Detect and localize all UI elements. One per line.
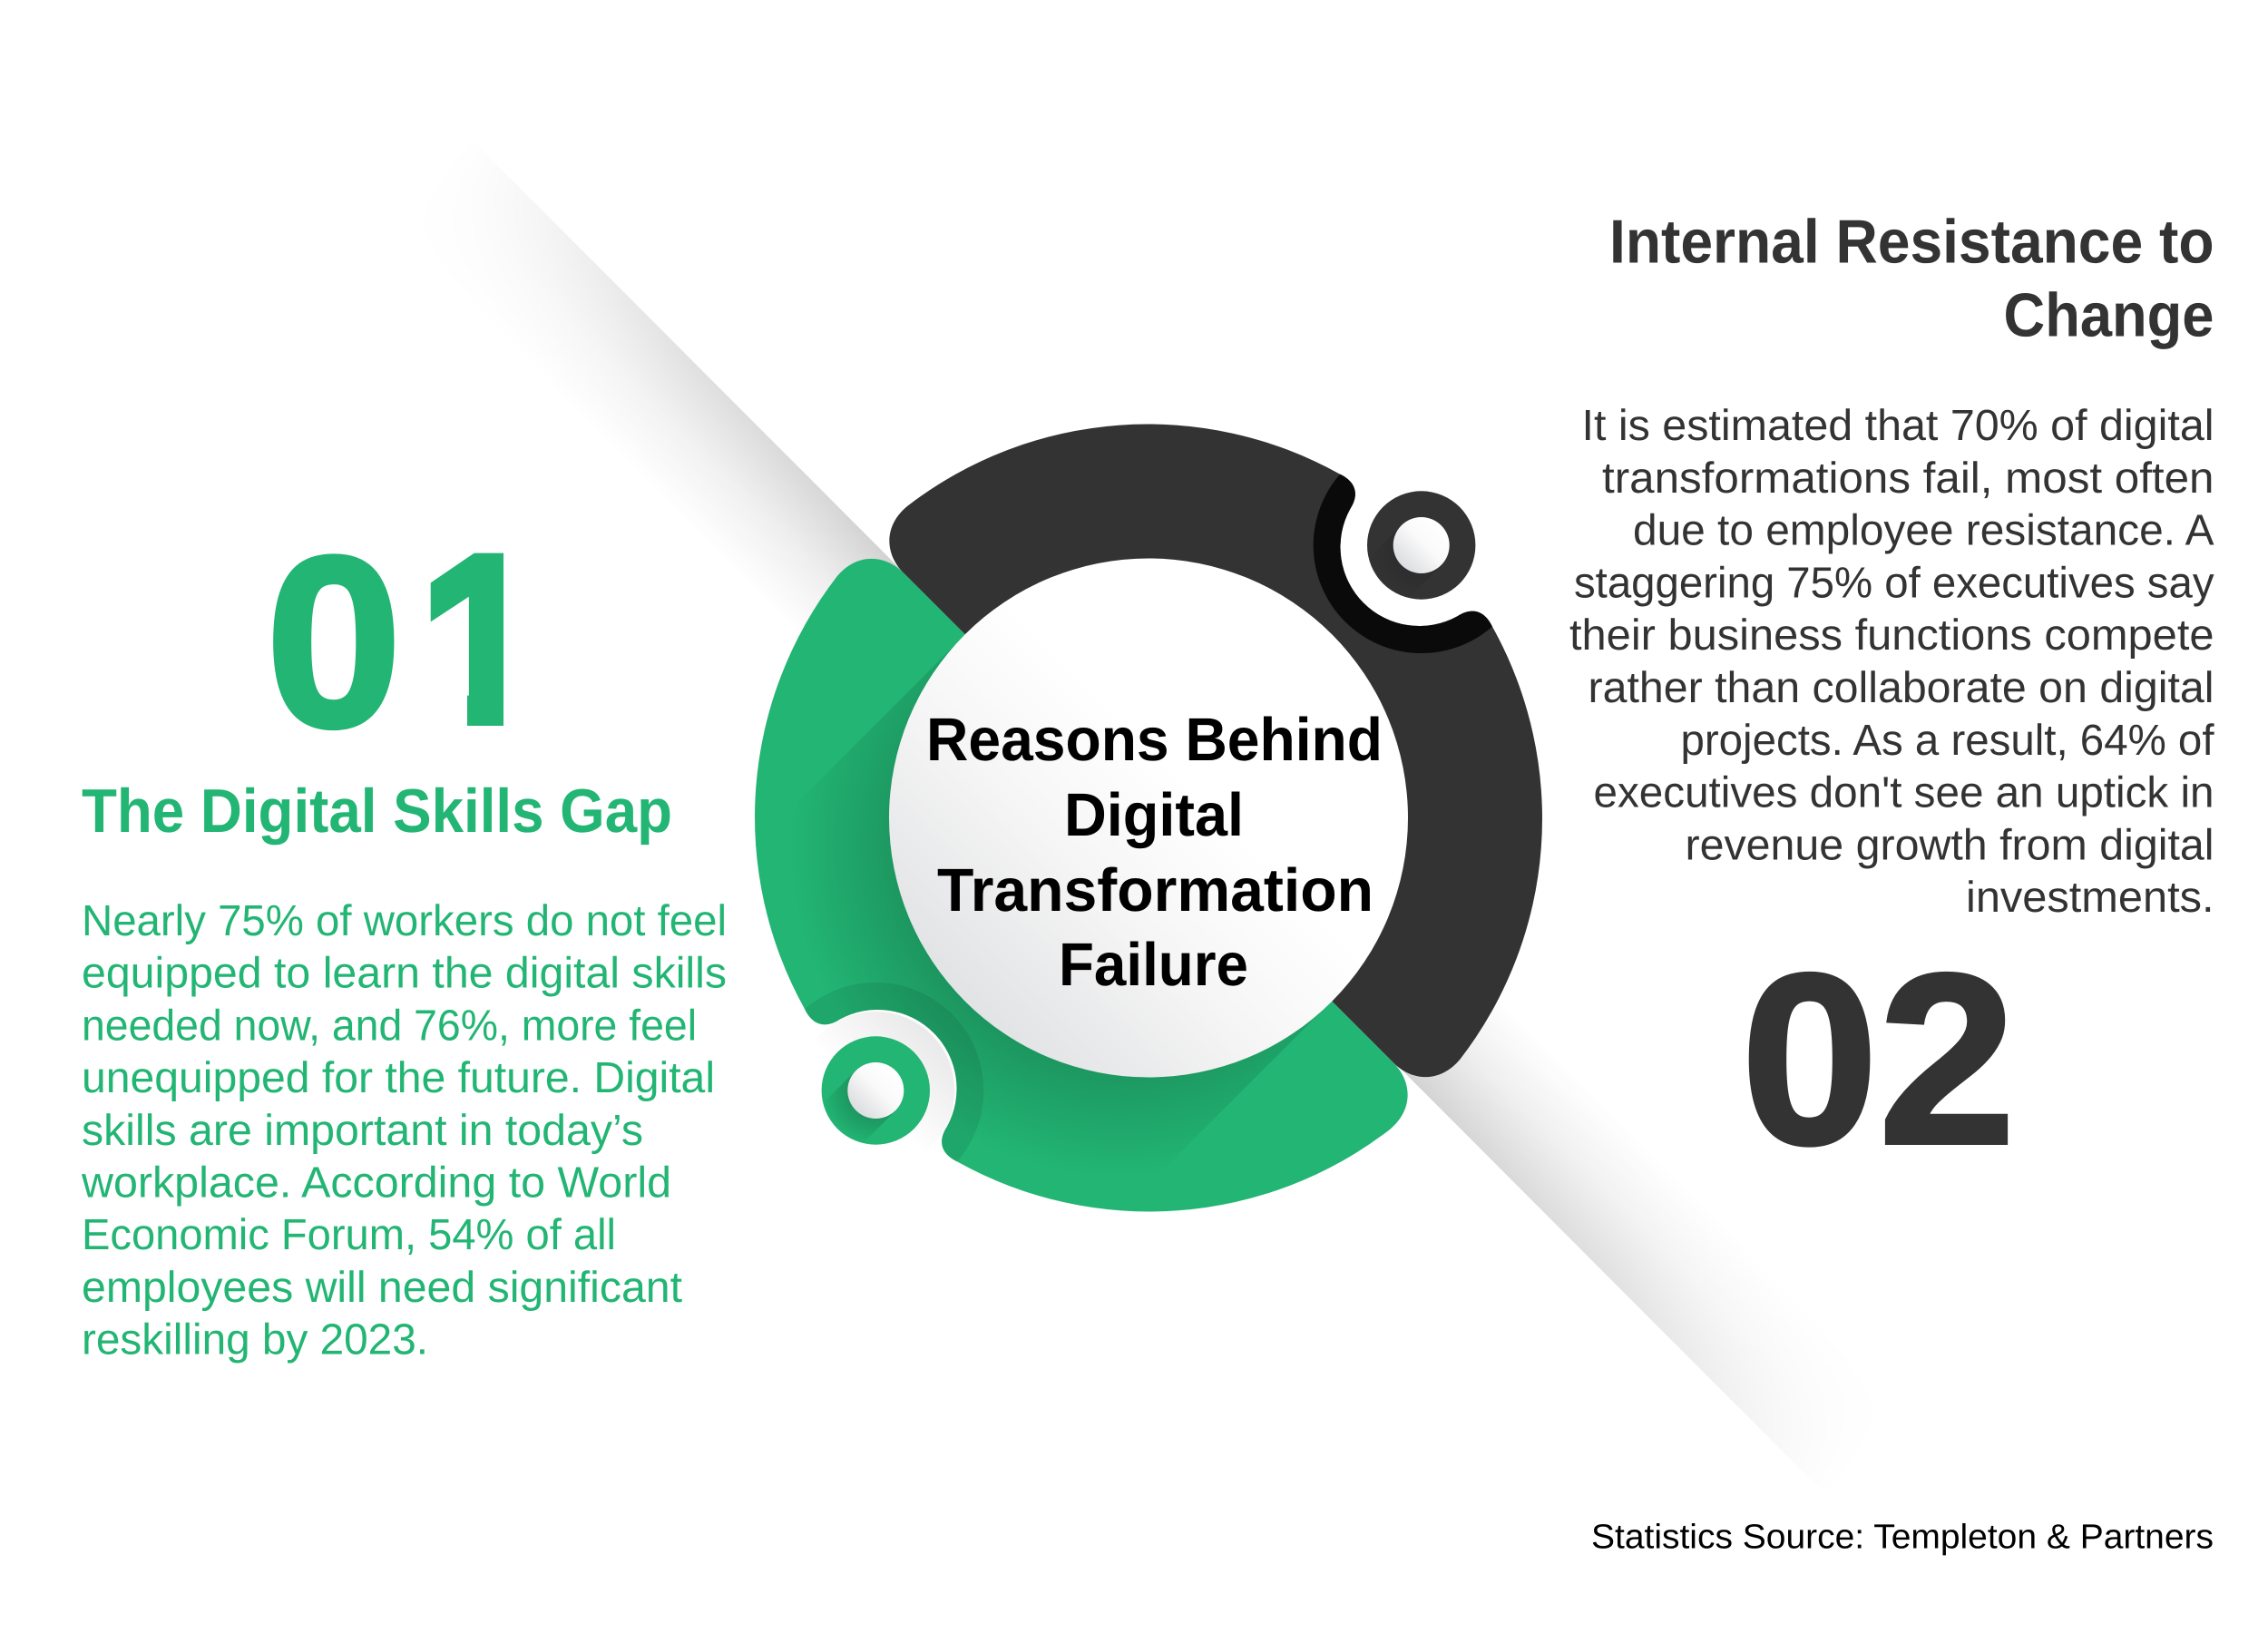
panel: the digital skills gap [81,505,727,1364]
source note: Statistics Source: Templeton & Partners [1591,1519,2214,1557]
icon: dark ring [1367,491,1475,600]
heading: the digital skills gap: The Digital Skills Gap [82,777,672,846]
heading: internal resistance to change: Change [2003,281,2214,350]
title: Reasons Behind [926,706,1383,774]
text block: resistance description: investments. [1966,874,2214,922]
diagonal shadow band: upper left [529,200,962,631]
heading: internal resistance to change [1609,207,2214,350]
center circle [889,559,1408,1078]
number 01: 0 [266,505,402,777]
text block: skills gap description: workplace. According to World [81,1159,671,1207]
text block: skills gap description: employees will need significant [82,1264,682,1312]
text block: resistance description: staggering 75% of executives say [1574,559,2214,607]
text block: resistance description: transformations fail, most often [1602,455,2214,503]
title: Transformation [937,856,1374,924]
diagonal shadow band: lower right [1401,1025,1768,1435]
text block: skills gap description: equipped to learn the digital skills [82,950,727,998]
title: Digital [1064,781,1244,849]
text block: skills gap description [81,897,727,1364]
text block: resistance description [1569,402,2214,922]
text block: skills gap description: skills are important in today’s [82,1107,643,1155]
title [926,706,1383,999]
green ring segment [755,559,1408,1212]
text block: resistance description: due to employee resistance. A [1633,507,2214,555]
panel: internal resistance to change [1569,207,2214,1195]
text block: resistance description: revenue growth from digital [1686,821,2214,869]
text block: resistance description: It is estimated that 70% of digital [1582,402,2214,450]
text block: resistance description: their business functions compete [1569,611,2214,660]
number 02: 02 [1741,923,2016,1195]
title: Failure [1059,931,1248,999]
text block: skills gap description: needed now, and 76%, more feel [82,1002,697,1050]
text block: skills gap description: unequipped for the future. Digital [82,1054,715,1102]
number 01: 1 [420,505,549,777]
central ring diagram [755,425,1542,1212]
text block: resistance description: executives don't see an uptick in [1593,769,2214,817]
heading: internal resistance to change: Internal Resistance to [1609,207,2214,276]
text block: skills gap description: Economic Forum, 54% of all [82,1211,616,1259]
text block: resistance description: rather than collaborate on digital [1588,664,2214,712]
text block: skills gap description: Nearly 75% of workers do not feel [82,897,727,945]
text block: resistance description: projects. As a result, 64% of [1680,717,2214,765]
icon: green ring [822,1036,930,1145]
number 01 [273,553,503,731]
dark ring segment [889,425,1542,1077]
text block: skills gap description: reskilling by 2023. [82,1316,428,1364]
